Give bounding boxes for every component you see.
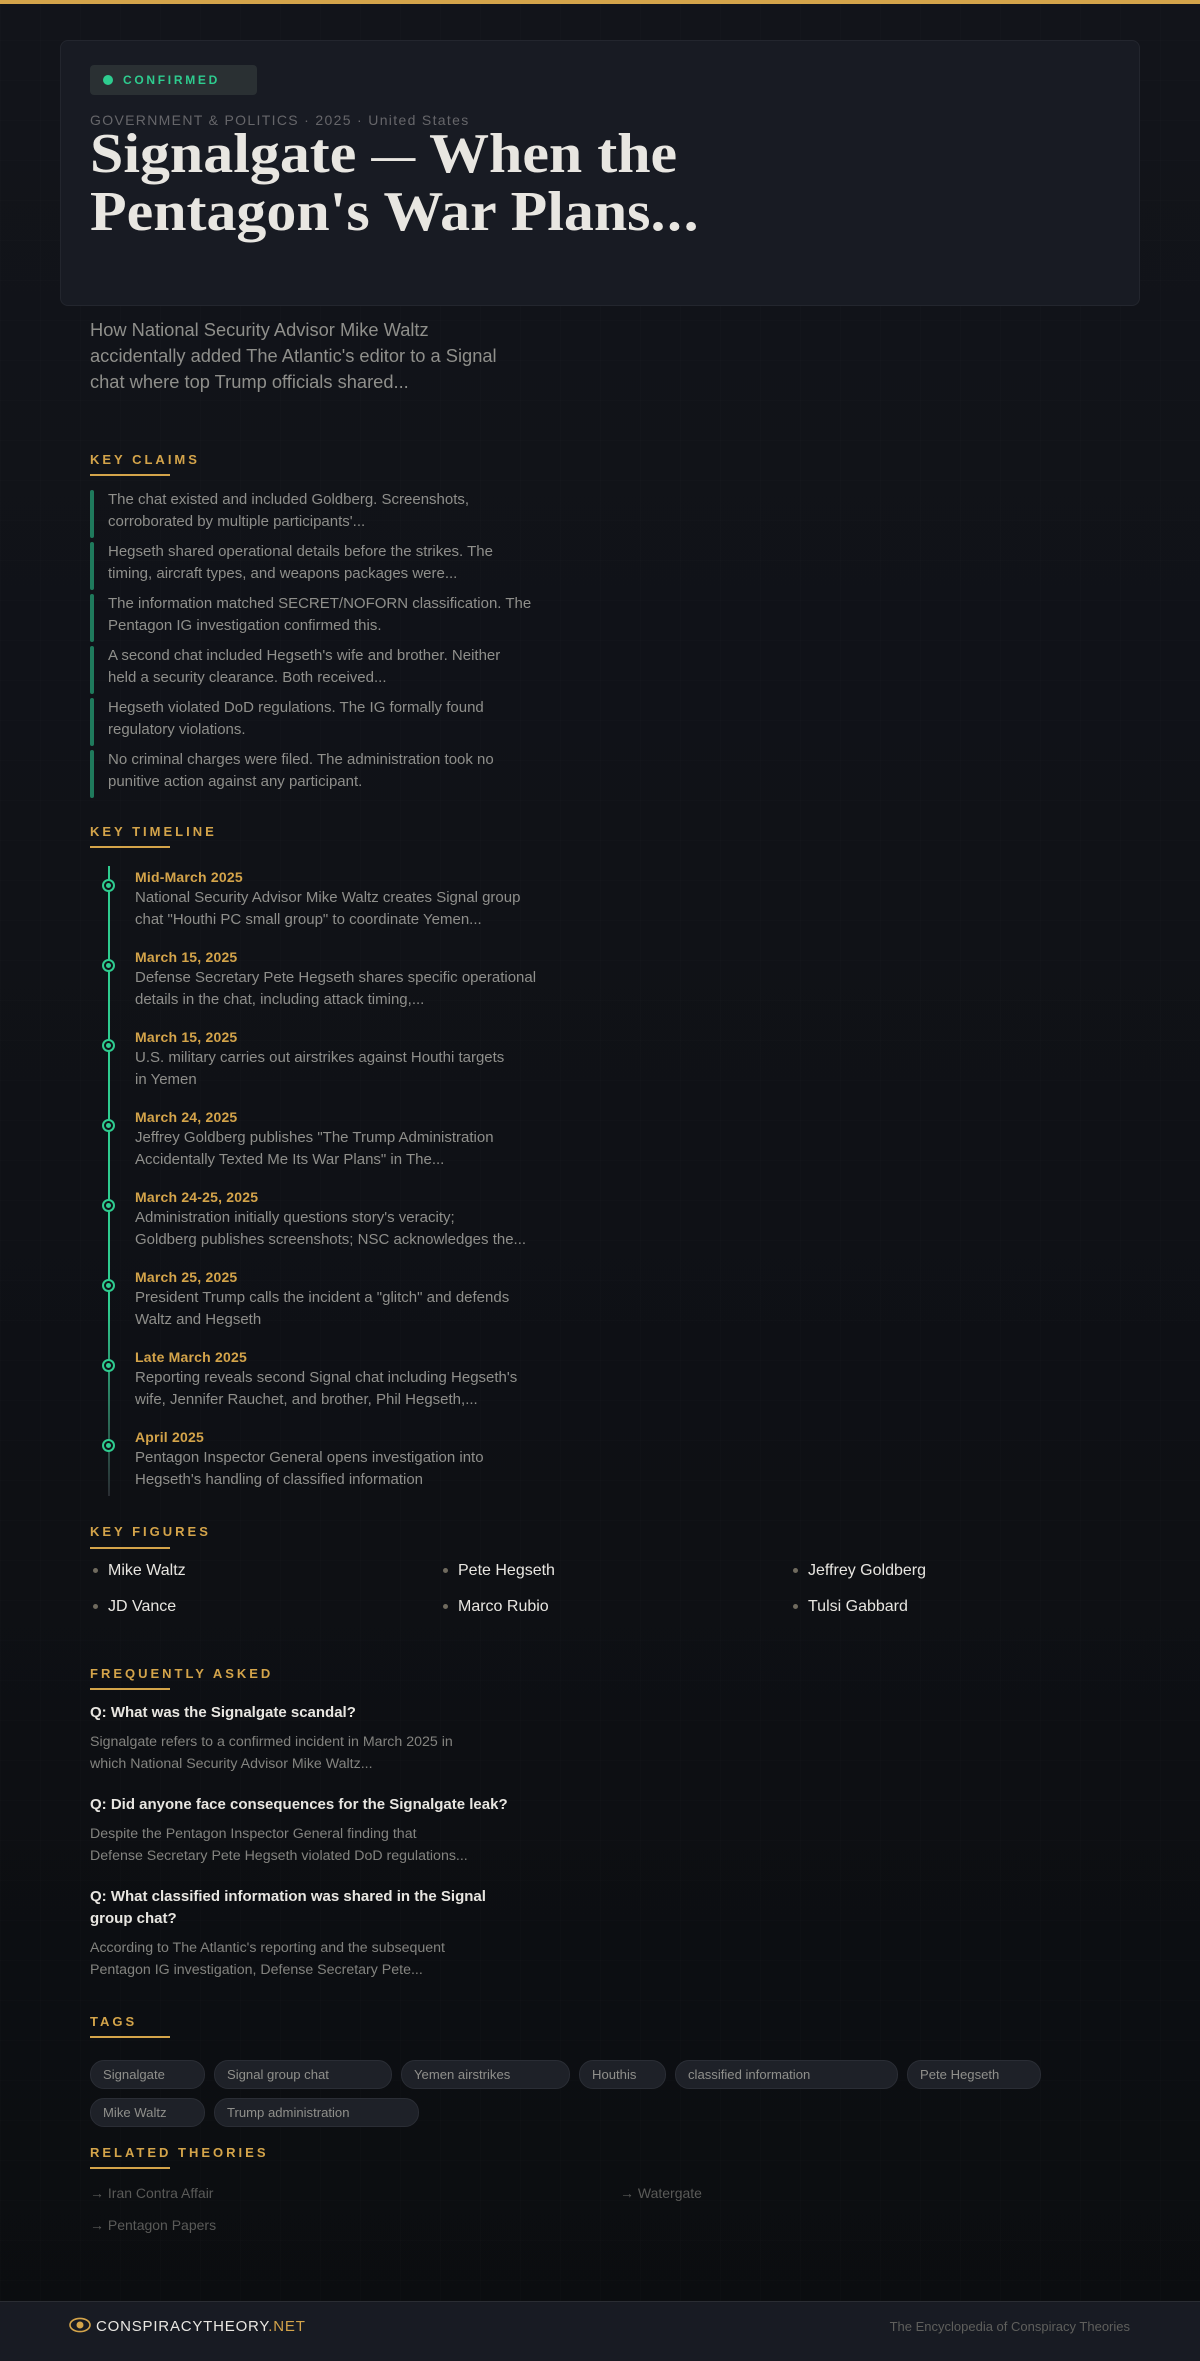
event 3: in Yemen [135,1071,197,1088]
title [90,123,700,243]
icon: status dot [103,75,113,85]
tag [90,2098,205,2127]
subtitle [90,319,497,392]
related link: → Watergate [620,2185,702,2201]
faq 3 [90,1888,486,1978]
timeline rail [108,866,110,1496]
faq 2: Despite the Pentagon Inspector General finding that [90,1826,417,1842]
title: Pentagon's War Plans... [90,181,700,243]
panel: key claims [90,490,531,798]
top accent bar [0,0,1200,4]
panel: related theories [90,2185,702,2233]
event 3: U.S. military carries out airstrikes against Houthi targets [135,1049,504,1066]
faq 2: Q: Did anyone face consequences for the Signalgate leak? [90,1796,508,1813]
claim 3: Pentagon IG investigation confirmed this. [108,617,382,634]
claim 5 [90,698,484,746]
event 2 [102,949,536,1008]
tag [907,2060,1041,2089]
faq 3: group chat? [90,1910,177,1927]
event 2: Defense Secretary Pete Hegseth shares specific operational [135,969,536,986]
claim 4: A second chat included Hegseth's wife and brother. Neither [108,647,500,664]
event 6: March 25, 2025 [135,1269,237,1285]
event 3: March 15, 2025 [135,1029,237,1045]
claim 4 [90,646,500,694]
badge label: CONFIRMED [123,73,220,87]
heading: frequently asked: FREQUENTLY ASKED [90,1666,273,1681]
tag [90,2060,205,2089]
claim 1: The chat existed and included Goldberg. Screenshots, [108,491,469,508]
title: Signalgate — When the [90,123,677,185]
figure: Pete Hegseth: Pete Hegseth [458,1562,555,1579]
claim 2: Hegseth shared operational details before the strikes. The [108,543,493,560]
figure: Jeffrey Goldberg: Jeffrey Goldberg [808,1562,926,1579]
subtitle: chat where top Trump officials shared... [90,371,409,392]
claim 6 [90,750,494,798]
faq 2: Defense Secretary Pete Hegseth violated DoD regulations... [90,1848,468,1864]
figure: Tulsi Gabbard: Tulsi Gabbard [808,1598,908,1615]
claim 1: corroborated by multiple participants'... [108,513,365,530]
faq 3: Q: What classified information was shared in the Signal [90,1888,486,1905]
event 8: April 2025 [135,1429,204,1445]
subtitle: How National Security Advisor Mike Waltz [90,319,429,340]
event 2: details in the chat, including attack timing,... [135,991,424,1008]
tag [579,2060,666,2089]
tag: classified information [688,2067,810,2082]
tag: Pete Hegseth [920,2067,999,2082]
event 7: Late March 2025 [135,1349,247,1365]
heading: key timeline: KEY TIMELINE [90,824,217,839]
heading: tags: TAGS [90,2014,137,2029]
footer tagline: The Encyclopedia of Conspiracy Theories [890,2319,1130,2334]
claim 6: No criminal charges were filed. The administration took no [108,751,494,768]
claim 2 [90,542,493,590]
tag: Houthis [592,2067,636,2082]
event 3 [102,1029,504,1088]
claim 6: punitive action against any participant. [108,773,362,790]
event 8: Pentagon Inspector General opens investigation into [135,1449,484,1466]
event 1: chat "Houthi PC small group" to coordinate Yemen... [135,911,482,928]
event 6 [102,1269,509,1328]
claim 5: regulatory violations. [108,721,246,738]
faq 1: Signalgate refers to a confirmed incident in March 2025 in [90,1734,453,1750]
event 8 [102,1429,484,1488]
tag: Trump administration [227,2105,350,2120]
tag: Signalgate [103,2067,165,2082]
event 1 [102,869,520,928]
claim 1 [90,490,469,538]
panel: tags [90,2060,1041,2127]
event 2: March 15, 2025 [135,949,237,965]
tag: Signal group chat [227,2067,329,2082]
event 4 [102,1109,494,1168]
panel: key figures [93,1562,926,1615]
figure: JD Vance: JD Vance [108,1598,176,1615]
event 6: Waltz and Hegseth [135,1311,261,1328]
status badge: confirmed [90,65,257,95]
chart: key timeline [102,866,536,1496]
faq 2 [90,1796,508,1864]
faq 3: Pentagon IG investigation, Defense Secretary Pete... [90,1962,423,1978]
faq 1: which National Security Advisor Mike Waltz... [90,1756,373,1772]
figure: Marco Rubio: Marco Rubio [458,1598,549,1615]
event 6: President Trump calls the incident a "glitch" and defends [135,1289,509,1306]
faq 1 [90,1704,453,1772]
tag: Mike Waltz [103,2105,167,2120]
claim 4: held a security clearance. Both received... [108,669,386,686]
claim 3: The information matched SECRET/NOFORN classification. The [108,595,531,612]
logo wordmark: CONSPIRACYTHEORY.NET [96,2318,306,2335]
tag [214,2060,392,2089]
claim 2: timing, aircraft types, and weapons packages were... [108,565,457,582]
event 7: wife, Jennifer Rauchet, and brother, Phil Hegseth,... [135,1391,478,1408]
related link: → Iran Contra Affair [90,2185,213,2201]
tag [675,2060,898,2089]
subtitle: accidentally added The Atlantic's editor to a Signal [90,345,497,366]
claim 3 [90,594,531,642]
event 7 [102,1349,517,1408]
heading: key claims: KEY CLAIMS [90,452,200,467]
tag: Yemen airstrikes [414,2067,510,2082]
category line: GOVERNMENT & POLITICS · 2025 · United States [90,112,470,128]
related link: → Pentagon Papers [90,2217,216,2233]
event 5: Administration initially questions story's veracity; [135,1209,455,1226]
icon: eye logo [69,2318,91,2332]
event 8: Hegseth's handling of classified information [135,1471,423,1488]
event 4: Accidentally Texted Me Its War Plans" in The... [135,1151,444,1168]
event 7: Reporting reveals second Signal chat including Hegseth's [135,1369,517,1386]
tag [214,2098,419,2127]
claim 5: Hegseth violated DoD regulations. The IG formally found [108,699,484,716]
event 1: Mid-March 2025 [135,869,243,885]
event 4: March 24, 2025 [135,1109,237,1125]
event 4: Jeffrey Goldberg publishes "The Trump Administration [135,1129,494,1146]
figure: Mike Waltz: Mike Waltz [108,1562,186,1579]
event 1: National Security Advisor Mike Waltz creates Signal group [135,889,520,906]
event 5 [102,1189,526,1248]
event 5: Goldberg publishes screenshots; NSC acknowledges the... [135,1231,526,1248]
footer [0,2301,1200,2361]
tag [401,2060,570,2089]
panel: hero [60,40,1140,306]
heading: key figures: KEY FIGURES [90,1524,211,1539]
faq 1: Q: What was the Signalgate scandal? [90,1704,356,1721]
event 5: March 24-25, 2025 [135,1189,258,1205]
heading: related theories: RELATED THEORIES [90,2145,268,2160]
faq 3: According to The Atlantic's reporting and the subsequent [90,1940,445,1956]
